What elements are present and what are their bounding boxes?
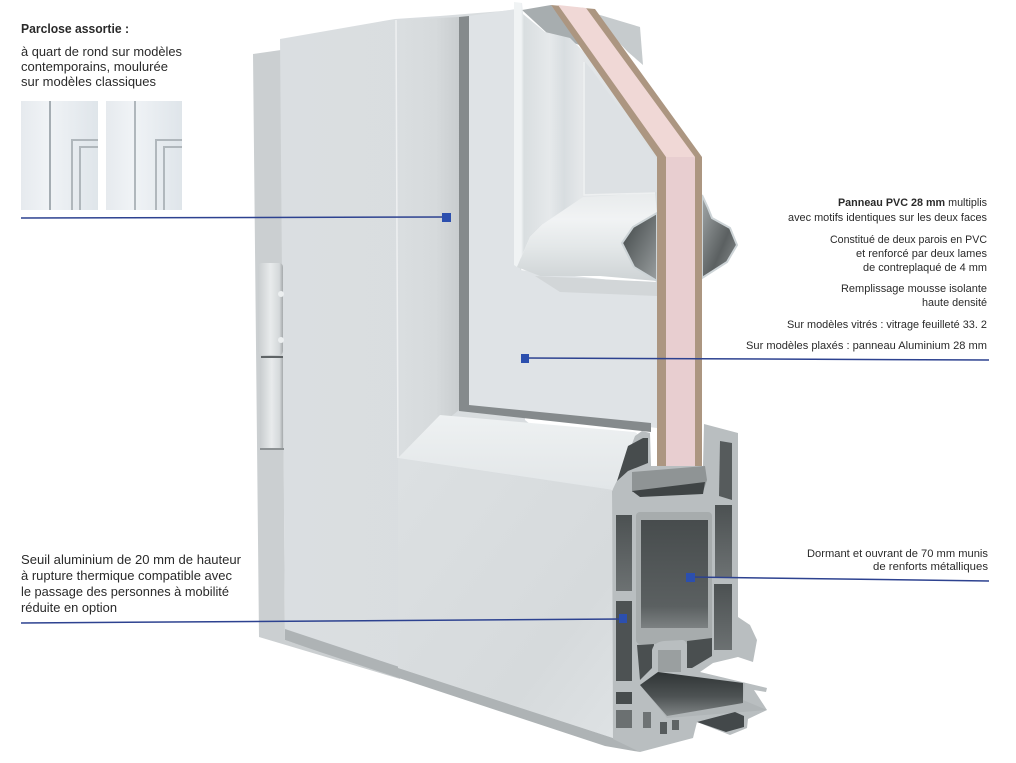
chamber below tube bbox=[637, 644, 654, 680]
text block: panneau PVC: de contreplaqué de 4 mm bbox=[863, 262, 987, 274]
reinforcement tube bbox=[636, 512, 712, 644]
text block: dormant et ouvrant: Dormant et ouvrant de 70 mm munis bbox=[807, 548, 988, 560]
text block: parclose description: sur modèles classiques bbox=[21, 75, 156, 89]
door cross-section illustration bbox=[253, 2, 767, 752]
leaf raised stile edge bbox=[396, 17, 459, 458]
thumbnail: quarter-round bead bbox=[21, 101, 98, 210]
text block: panneau PVC: Sur modèles plaxés : panneau Aluminium 28 mm bbox=[746, 340, 987, 352]
text block: dormant et ouvrant: de renforts métalliques bbox=[873, 561, 989, 573]
grey lower edge of door bbox=[285, 628, 640, 752]
thumbnail: moulded bead bbox=[106, 101, 182, 210]
door leaf face bbox=[280, 10, 613, 738]
text block: seuil aluminium: Seuil aluminium de 20 mm de hauteur bbox=[21, 553, 241, 567]
threshold small chambers bbox=[616, 692, 744, 734]
threshold dark recess bbox=[640, 672, 767, 718]
text block: parclose description: contemporains, moulurée bbox=[21, 60, 168, 74]
upper moulding dark interior bbox=[522, 5, 643, 65]
moulding inner recess bbox=[585, 62, 657, 194]
grey panel gasket bbox=[459, 16, 651, 432]
callout line: parclose bbox=[21, 213, 451, 222]
text block: panneau PVC: et renforcé par deux lames bbox=[856, 248, 987, 260]
hinge bbox=[258, 263, 284, 450]
text block: panneau PVC: Sur modèles vitrés : vitrage feuilleté 33. 2 bbox=[787, 319, 987, 331]
text block: parclose description bbox=[21, 45, 182, 89]
callout line: dormant bbox=[686, 573, 989, 582]
text block: parclose description: à quart de rond sur modèles bbox=[21, 45, 182, 59]
sill body lower face bbox=[398, 458, 613, 738]
text block: seuil aluminium: le passage des personnes à mobilité bbox=[21, 585, 229, 599]
callout line: panneau bbox=[521, 354, 989, 363]
moulding lower shadow bbox=[535, 276, 657, 296]
door frame side strip bbox=[253, 50, 400, 679]
text block: panneau PVC bbox=[746, 197, 987, 352]
text block: panneau PVC: avec motifs identiques sur les deux faces bbox=[788, 212, 987, 224]
heading: Parclose assortie: Parclose assortie : bbox=[21, 22, 129, 36]
upper moulding bbox=[514, 2, 657, 267]
text block: panneau PVC: Remplissage mousse isolante bbox=[841, 283, 987, 295]
glazing panel surface bbox=[469, 9, 657, 428]
glazing bead bbox=[632, 466, 707, 492]
right moulding cut section bbox=[702, 195, 737, 278]
text block: seuil aluminium: à rupture thermique compatible avec bbox=[21, 569, 232, 583]
text block: dormant et ouvrant bbox=[807, 548, 989, 573]
left moulding cut section bbox=[622, 213, 657, 281]
moulding inner frame highlight bbox=[584, 62, 655, 195]
text block: panneau PVC: Panneau PVC 28 mm multiplis bbox=[838, 197, 987, 209]
upper-right chamber bbox=[719, 441, 732, 500]
text block: panneau PVC: haute densité bbox=[922, 297, 987, 309]
text block: panneau PVC: Constitué de deux parois en PVC bbox=[830, 234, 987, 246]
PVC panel section: plywood and foam bbox=[551, 5, 702, 466]
lower moulding bbox=[517, 193, 657, 281]
profile body bbox=[612, 424, 767, 752]
profile cross-section bbox=[612, 424, 767, 752]
text block: seuil aluminium bbox=[21, 553, 241, 615]
text block: seuil aluminium: réduite en option bbox=[21, 601, 117, 615]
sloped sill top bbox=[398, 415, 637, 490]
right chambers bbox=[715, 505, 732, 577]
upper-left chamber bbox=[617, 438, 648, 481]
central clip bbox=[652, 640, 687, 672]
left chambers bbox=[616, 515, 632, 591]
callout line: seuil bbox=[21, 614, 627, 623]
